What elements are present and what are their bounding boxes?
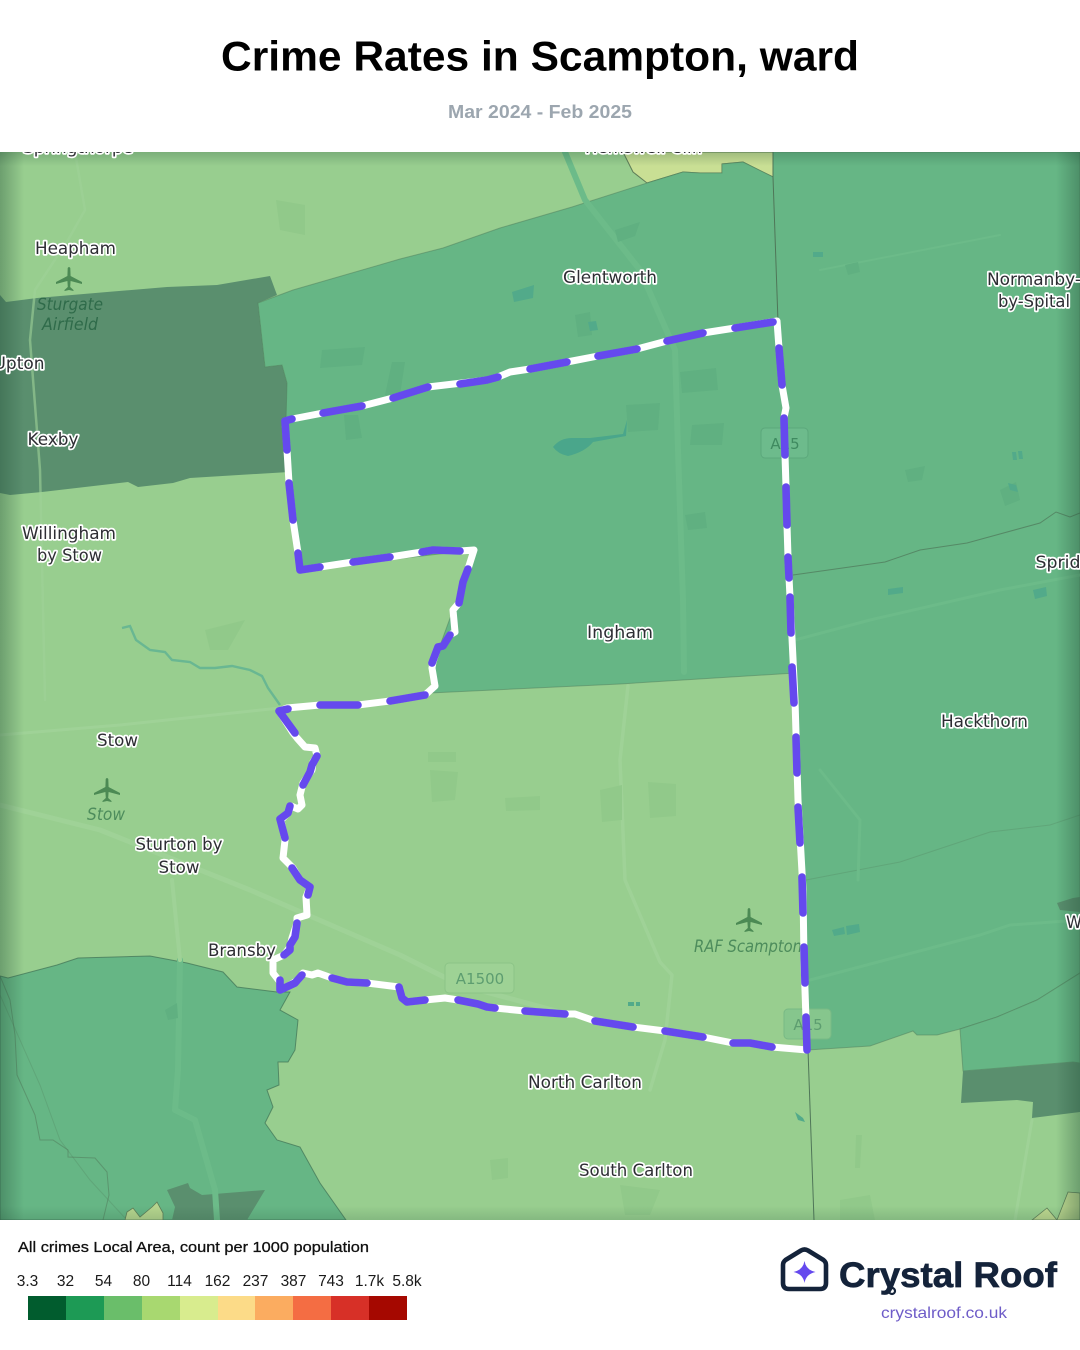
icon: airfield plane Stow bbox=[94, 778, 120, 802]
legend scale values bbox=[17, 1273, 422, 1290]
place labels: South Carlton bbox=[579, 1161, 693, 1181]
ward boundary bbox=[273, 321, 807, 1050]
boundary white outline bbox=[273, 321, 807, 1050]
icon: airfield plane Sturgate bbox=[56, 267, 82, 291]
region: dark green south patch bbox=[167, 1183, 265, 1220]
airfield label: Sturgate Airfield: Sturgate bbox=[37, 295, 103, 314]
website url: crystalroof.co.uk bbox=[881, 1305, 1008, 1322]
legend heading: All crimes Local Area, count per 1000 population bbox=[18, 1239, 369, 1256]
legend scale values: 80 bbox=[133, 1273, 150, 1290]
map base: light green area bbox=[0, 152, 1080, 1220]
lake bbox=[553, 420, 627, 456]
road shield: A1500: A1500 bbox=[456, 970, 504, 988]
place labels: North Carlton bbox=[528, 1073, 642, 1093]
region: dark green east edge bbox=[1057, 897, 1080, 912]
region: mid green south-east block bbox=[960, 973, 1080, 1071]
region: dark green south-east bbox=[961, 1062, 1080, 1118]
place labels: Springthorpe bbox=[23, 138, 133, 158]
legend scale values: 54 bbox=[95, 1273, 112, 1290]
light area field patches bbox=[619, 785, 622, 820]
place labels: Hackthorn bbox=[941, 712, 1028, 732]
place labels: Sturton by bbox=[136, 835, 222, 855]
thin boundary lines bbox=[0, 152, 1080, 1220]
legend colour bar bbox=[28, 1296, 407, 1320]
road shield: A15 south: A15 bbox=[793, 1016, 823, 1034]
legend scale values: 5.8k bbox=[392, 1273, 422, 1290]
region: mid green central and east bbox=[258, 152, 1080, 1050]
place labels: Glentworth bbox=[563, 268, 657, 288]
place labels: by Stow bbox=[37, 546, 102, 566]
place labels: Kexby bbox=[28, 430, 78, 450]
subtitle: date range: Mar 2024 - Feb 2025 bbox=[448, 102, 632, 122]
place labels: Hemswell Cliff bbox=[585, 138, 704, 158]
region: pale green south-east corner bbox=[1032, 1192, 1080, 1220]
region: pale yellow-green top bbox=[623, 152, 773, 183]
logo: Crystal Roof bbox=[783, 1250, 1057, 1322]
legend scale values: 743 bbox=[318, 1273, 344, 1290]
legend scale values: 3.3 bbox=[17, 1273, 38, 1290]
roads bbox=[0, 152, 1080, 1220]
place labels: Ingham bbox=[587, 623, 653, 643]
legend bbox=[17, 1239, 422, 1320]
legend scale values: 237 bbox=[243, 1273, 268, 1290]
place labels: Bransby bbox=[208, 941, 276, 961]
road shield: A15 south bbox=[784, 1009, 831, 1039]
road shield: A15 north bbox=[761, 428, 808, 458]
boundary purple dashes bbox=[279, 322, 807, 1050]
region: dark green west bbox=[0, 276, 289, 495]
legend scale values: 387 bbox=[281, 1273, 306, 1290]
icon: house with star bbox=[783, 1250, 826, 1289]
legend scale values: 1.7k bbox=[355, 1273, 384, 1290]
road shield: A15 north: A15 bbox=[770, 435, 800, 453]
icon: airfield plane RAF Scampton bbox=[736, 908, 762, 932]
field and building patches bbox=[176, 236, 858, 1018]
title: Crime Rates in Scampton, ward bbox=[221, 32, 859, 80]
road shield: A1500 bbox=[445, 963, 514, 993]
water patches bbox=[512, 252, 1047, 1122]
region: pale green south patch bbox=[125, 1202, 163, 1220]
place labels: Heapham bbox=[35, 239, 116, 259]
logo y-descender ring bbox=[889, 1288, 895, 1294]
airfield label: RAF Scampton: RAF Scampton bbox=[694, 937, 802, 956]
place labels: by-Spital bbox=[998, 292, 1070, 312]
airfield label: Sturgate Airfield bbox=[37, 298, 102, 330]
place labels: Stow bbox=[97, 731, 138, 751]
place labels: Normanby- bbox=[987, 270, 1080, 290]
place labels: Stow bbox=[158, 858, 200, 878]
river bbox=[122, 626, 280, 705]
legend scale values: 114 bbox=[167, 1273, 192, 1290]
legend scale values: 32 bbox=[57, 1273, 74, 1290]
airfield label: Sturgate Airfield: Airfield bbox=[41, 315, 98, 334]
place labels: Willingham bbox=[22, 524, 116, 544]
logo wordmark: Crystal Roof bbox=[839, 1256, 1057, 1295]
map edge shading bbox=[0, 152, 1080, 1220]
legend scale values: 162 bbox=[205, 1273, 230, 1290]
place labels bbox=[0, 138, 1080, 1181]
airfield label: Stow: Stow bbox=[87, 805, 125, 824]
region: mid green south-west bbox=[0, 956, 346, 1220]
